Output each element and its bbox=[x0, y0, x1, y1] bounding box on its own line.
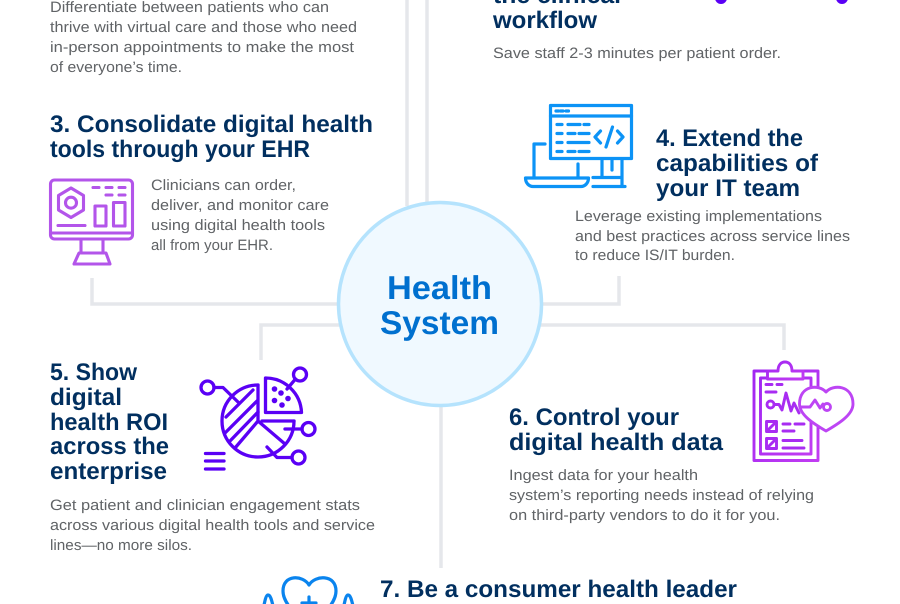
heading: step 4: 4. Extend the bbox=[656, 125, 803, 152]
heading: step 4: your IT team bbox=[656, 175, 800, 202]
heading: step 6: digital health data bbox=[509, 429, 724, 456]
heading: step 5 bbox=[50, 359, 169, 485]
text: step 3 description: using digital health tools bbox=[151, 217, 325, 234]
section 2: virtual care text: in-person appointments to make the most bbox=[50, 39, 355, 56]
text: step 3 description: Clinicians can order, bbox=[151, 177, 296, 194]
text: step 5 description: Get patient and clinician engagement stats bbox=[50, 497, 360, 514]
heading: step 5: enterprise bbox=[50, 458, 167, 485]
text: step 4 description: and best practices across service lines bbox=[575, 228, 850, 245]
heading: step 6: 6. Control your bbox=[509, 404, 679, 431]
text: step 4 description: to reduce IS/IT burden. bbox=[575, 247, 735, 264]
section 2: virtual care text: of everyone’s time. bbox=[50, 59, 182, 76]
center circle: Health System: Health bbox=[387, 269, 492, 306]
heading: step 3: 3. Consolidate digital health bbox=[50, 111, 373, 138]
heading: step 3: tools through your EHR bbox=[50, 136, 310, 163]
text: step 6 description: system’s reporting needs instead of relying bbox=[509, 487, 814, 504]
heading: step 7: 7. Be a consumer health leader bbox=[380, 576, 737, 603]
text: step 6 description bbox=[509, 467, 814, 524]
text: step 3 description bbox=[151, 177, 329, 254]
text: step 4 description bbox=[575, 208, 850, 264]
icon: pie chart with nodes bbox=[201, 368, 315, 469]
heading: step 5: 5. Show bbox=[50, 359, 137, 386]
text: step 4 description: Leverage existing implementations bbox=[575, 208, 822, 225]
center circle: Health System bbox=[338, 202, 542, 406]
icon: heart with plus and pulse bbox=[263, 578, 354, 604]
icon: monitor dashboard bbox=[50, 180, 132, 264]
icon: clipboard and heart bbox=[754, 362, 853, 460]
text: step 5 description bbox=[50, 497, 375, 554]
text: step 3 description: deliver, and monitor care bbox=[151, 197, 329, 214]
icon: purple dots cut off at the top bbox=[715, 0, 848, 4]
text: save staff: Save staff 2-3 minutes per patient order. bbox=[493, 45, 781, 62]
heading: step 5: digital bbox=[50, 384, 122, 411]
heading: step 4: capabilities of bbox=[656, 150, 819, 177]
heading: step 3 bbox=[50, 111, 373, 163]
section 2: virtual care text: thrive with virtual care and those who need bbox=[50, 19, 357, 36]
heading: step 4 bbox=[656, 125, 819, 202]
heading: step 5: health ROI bbox=[50, 409, 168, 436]
text: step 6 description: on third-party vendors to do it for you. bbox=[509, 507, 780, 524]
heading: clinical workflow: workflow bbox=[492, 7, 597, 34]
heading: step 6 bbox=[509, 404, 724, 456]
center circle: Health System: System bbox=[380, 304, 499, 341]
text: step 5 description: lines—no more silos. bbox=[50, 537, 192, 554]
icon: computer and code window bbox=[526, 106, 632, 186]
text: step 6 description: Ingest data for your health bbox=[509, 467, 698, 484]
text: step 5 description: across various digital health tools and service bbox=[50, 517, 375, 534]
connector lines bbox=[92, 0, 784, 568]
text: step 3 description: all from your EHR. bbox=[151, 237, 273, 254]
heading: step 5: across the bbox=[50, 433, 169, 460]
heading: clinical workflow bbox=[492, 0, 621, 34]
section 2: virtual care text bbox=[50, 0, 357, 76]
